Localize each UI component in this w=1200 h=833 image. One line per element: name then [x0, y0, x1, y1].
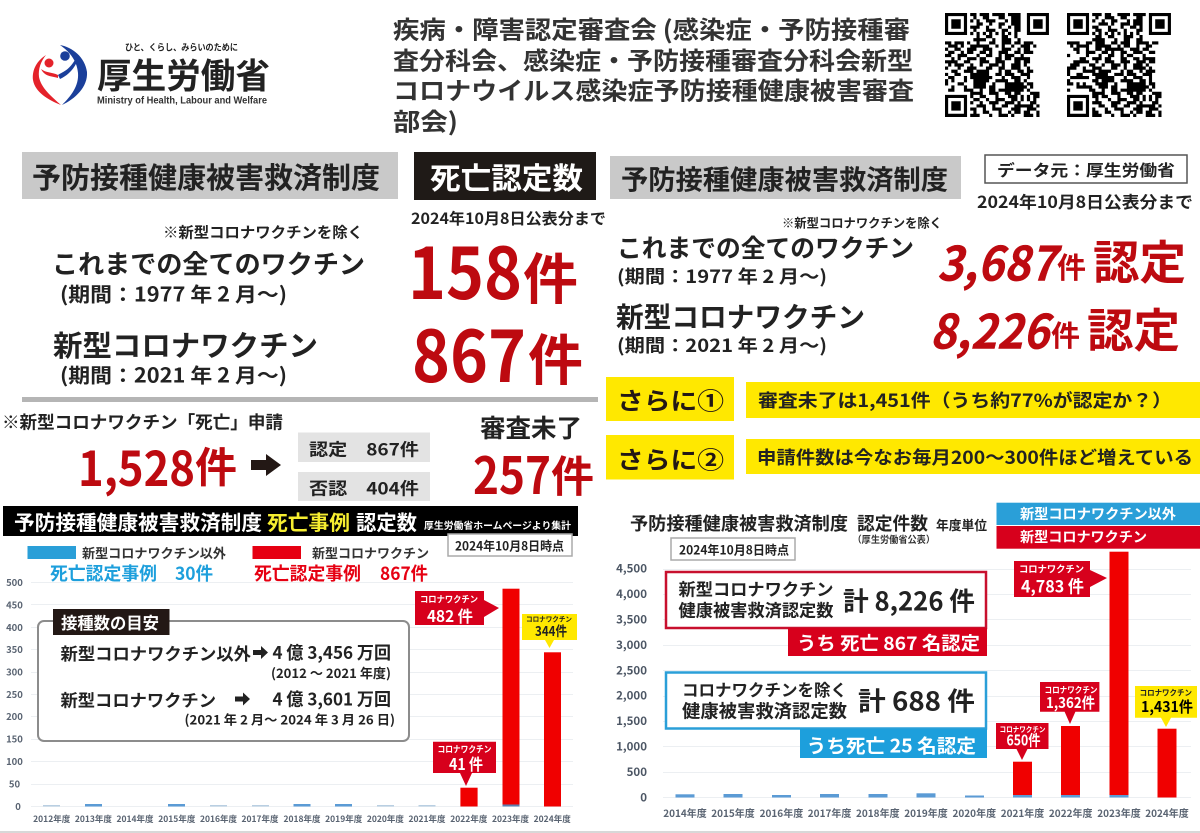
stat: 8,226 certified: 件: [1051, 313, 1080, 355]
x axis years: 2020年度: [367, 813, 404, 825]
label: covid vaccine: (期間：2021 年 2 月〜): [617, 332, 827, 358]
bar chart: deaths by year: [43, 589, 561, 806]
chart title: （厚生労働省公表）: [852, 532, 935, 546]
legend: 新型コロナワクチン以外: [82, 543, 226, 562]
label: covid vaccine: 新型コロナワクチン: [53, 323, 318, 365]
x axis years: 2017年度: [808, 805, 851, 820]
stat: 1,528: 件: [195, 434, 237, 496]
stat box: denied: 否認 404件: [309, 474, 419, 500]
callout: 650: 650件: [1006, 730, 1040, 750]
label: all vaccines: [617, 229, 914, 289]
panel: left death chart: [3, 506, 578, 825]
chart title bar: 厚生労働省ホームページより集計: [424, 518, 571, 532]
callout: 4,783: コロナワクチン: [1019, 562, 1084, 576]
gridlines and y axis: 100: [6, 754, 23, 768]
gridlines and y axis: 50: [9, 776, 20, 790]
label: covid vaccine: [53, 323, 318, 388]
x axis years: 2023年度: [492, 813, 530, 825]
callout: 1,362: [1040, 682, 1099, 724]
callout: further 1: さらに①: [617, 382, 724, 416]
info box: other vaccines total: 健康被害救済認定数: [682, 698, 847, 724]
stat box: certified: 認定 867件: [309, 436, 419, 460]
gridlines and y axis: 3,000: [616, 637, 647, 653]
legend bands: 新型コロナワクチン: [1020, 527, 1147, 547]
stat: 158: 件: [523, 235, 578, 315]
heading: committee title: 部会): [393, 104, 458, 138]
info box: vaccination count guide: 4 億 3,601 万回: [272, 686, 391, 712]
label: all vaccines: これまでの全てのワクチン: [52, 244, 365, 282]
callout: 41: 41 件: [449, 751, 483, 775]
info box: covid vaccine total: 新型コロナワクチン: [678, 576, 834, 600]
gridlines and y axis: 0: [15, 799, 21, 813]
label: all vaccines: [52, 244, 365, 308]
chart title bar: [3, 506, 578, 536]
callout: 344: 344件: [535, 620, 567, 640]
heading: committee title: 疾病・障害認定審査会 (感染症・予防接種審: [393, 12, 910, 46]
chart title bar: 予防接種健康被害救済制度: [14, 506, 262, 536]
x axis years: 2021年度: [1001, 805, 1044, 820]
date box: 2024年10月8日時点: [679, 540, 789, 558]
info box: other vaccines total: 計 688 件: [858, 682, 975, 718]
callout: 482: コロナワクチン: [420, 592, 478, 606]
x axis years: [663, 805, 1189, 820]
gridlines and y axis: 4,000: [616, 586, 647, 602]
label: covid death applications: ※新型コロナワクチン「死亡」申請: [2, 410, 283, 434]
x axis years: 2018年度: [856, 805, 900, 820]
x axis years: 2022年度: [450, 813, 488, 825]
logo tagline: ひと、くらし、みらいのために: [125, 40, 238, 54]
heading: death certification count: 死亡認定数: [430, 154, 583, 198]
callout: further 1: [606, 377, 1200, 421]
stat: 3,687 certified: 3,687: [937, 226, 1063, 294]
gridlines and y axis: 4,500: [616, 561, 647, 577]
x axis years: 2017年度: [241, 813, 279, 825]
legend: 30件: [175, 560, 213, 586]
callout: 41: コロナワクチン: [438, 742, 492, 756]
x axis years: 2019年度: [325, 813, 363, 825]
icon: heart figures: [33, 45, 87, 105]
gridlines and y axis: 2,000: [616, 688, 647, 704]
callout: 1,362: コロナワクチン: [1044, 684, 1098, 696]
callout: 4,783: [1014, 561, 1107, 598]
chart title bar: 死亡事例: [267, 506, 350, 536]
info box: vaccination count guide: 接種数の目安: [61, 610, 159, 634]
gridlines and y axis: 500: [6, 575, 23, 589]
source box: データ元：厚生労働省: [997, 157, 1175, 181]
x axis years: 2015年度: [158, 813, 196, 825]
callout: 650: [996, 723, 1048, 760]
gridlines and y axis: 250: [6, 687, 23, 701]
legend: 867件: [380, 560, 428, 586]
stat: 8,226 certified: 8,226: [930, 294, 1055, 362]
note: published date: 2024年10月8日公表分まで: [411, 207, 606, 229]
info box: vaccination count guide: (2021 年 2 月～ 2024 年 3 月 26 日): [184, 710, 395, 728]
heading: committee title: 査分科会、感染症・予防接種審査分科会新型: [393, 42, 913, 78]
chart title: [630, 510, 987, 546]
callout: 1,431: [1135, 686, 1197, 727]
x axis years: 2019年度: [904, 805, 948, 820]
gridlines and y axis: 150: [6, 732, 23, 746]
stat: 3,687 certified: 認定: [1093, 227, 1186, 293]
info box: other vaccines total: [666, 672, 987, 758]
chart title: 予防接種健康被害救済制度: [630, 510, 848, 536]
info box: vaccination count guide: [38, 609, 409, 741]
legend: 死亡認定事例: [50, 560, 157, 586]
label: covid vaccine: (期間：2021 年 2 月〜): [60, 360, 287, 388]
arrow: [251, 454, 281, 476]
stat: 867: 867: [412, 301, 526, 403]
callout: further 2: [606, 435, 1200, 480]
callout: further 2: 申請件数は今なお毎月200〜300件ほど増えている: [757, 444, 1193, 470]
stat: 8,226 certified: [930, 294, 1180, 362]
legend: 死亡認定事例: [254, 560, 361, 586]
gridlines and y axis: 500: [627, 764, 647, 780]
x axis years: 2014年度: [116, 813, 154, 825]
gridlines and y axis: 1,500: [616, 713, 647, 729]
bar chart: certifications by year: [676, 552, 1176, 798]
x axis years: 2014年度: [663, 805, 707, 820]
label: covid vaccine: [616, 296, 865, 358]
x axis years: 2021年度: [408, 813, 446, 825]
callout: 482: [415, 591, 499, 627]
info box: vaccination count guide: (2012 ～ 2021 年度): [271, 663, 391, 682]
logo wordmark: 厚生労働省: [97, 48, 270, 100]
label: all vaccines: (期間：1977 年 2 月〜): [60, 278, 287, 308]
label: all vaccines: (期間：1977 年 2 月〜): [617, 263, 827, 289]
stat: 3,687 certified: [937, 226, 1186, 294]
callout: further 1: 審査未了は1,451件（うち約77%が認定か？）: [758, 387, 1172, 413]
gridlines and y axis: 200: [6, 709, 23, 723]
icon: QR code 2: [1067, 13, 1171, 117]
callout: further 2: さらに②: [617, 440, 724, 476]
callout: 344: [522, 614, 577, 648]
gridlines and y axis: 3,500: [616, 612, 647, 628]
callout: 4,783: 4,783 件: [1021, 572, 1084, 598]
x axis years: 2023年度: [1097, 805, 1141, 820]
stat: 257: 257: [473, 435, 551, 509]
info box: covid vaccine total: うち 死亡 867 名認定: [797, 630, 980, 656]
x axis years: 2012年度: [33, 813, 71, 825]
callout: 482: 482 件: [427, 603, 473, 627]
gridlines and y axis: 2,500: [616, 662, 647, 678]
x axis years: 2018年度: [283, 813, 321, 825]
legend: [28, 543, 429, 586]
logo english name: Ministry of Health, Labour and Welfare: [97, 96, 267, 106]
info box: vaccination count guide: 4 億 3,456 万回: [272, 640, 391, 665]
chart title: 認定件数: [857, 510, 928, 536]
stat box: certified: [298, 432, 430, 462]
legend bands: 新型コロナワクチン以外: [1020, 504, 1177, 524]
date box: 2024年10月8日時点: [455, 536, 564, 554]
x axis years: 2024年度: [1145, 805, 1189, 820]
info box: covid vaccine total: 計 8,226 件: [843, 582, 975, 618]
label: covid vaccine: 新型コロナワクチン: [616, 296, 865, 336]
heading: committee title: コロナウイルス感染症予防接種健康被害審査: [393, 72, 914, 108]
stat: 867: 件: [528, 316, 583, 396]
x axis years: 2016年度: [200, 813, 238, 825]
stat: 3,687 certified: 件: [1057, 245, 1086, 287]
note: excluding covid vaccines: ※新型コロナワクチンを除く: [782, 212, 942, 232]
legend bands: [996, 503, 1200, 549]
note: published date: 2024年10月8日公表分まで: [977, 189, 1193, 213]
gridlines and y axis: 450: [6, 598, 23, 612]
logo: Ministry of Health, Labour and Welfare: [33, 40, 270, 106]
gridlines and y axis: [6, 575, 573, 813]
gridlines and y axis: 1,000: [616, 738, 647, 754]
chart title: 年度単位: [936, 515, 987, 534]
heading: relief system right: 予防接種健康被害救済制度: [621, 158, 948, 198]
callout: 344: コロナワクチン: [526, 614, 572, 624]
note: excluding covid vaccines: ※新型コロナワクチンを除く: [163, 222, 363, 242]
x axis years: 2016年度: [760, 805, 803, 820]
stat: 257: 件: [551, 443, 594, 505]
gridlines and y axis: [616, 561, 1191, 805]
chart title bar: 認定数: [356, 506, 417, 536]
panel: left death certification: [2, 152, 606, 509]
source box: [985, 155, 1187, 183]
info box: covid vaccine total: 健康被害救済認定数: [678, 596, 834, 622]
legend: 新型コロナワクチン: [312, 543, 429, 562]
panel: right certification: [606, 155, 1200, 480]
stat: 1,528: 1,528: [78, 430, 195, 500]
icon: QR code 1: [945, 13, 1049, 117]
x axis years: 2020年度: [952, 805, 996, 820]
label: review pending: 審査未了: [480, 409, 582, 445]
stat: 158: 158: [408, 218, 522, 320]
info box: vaccination count guide: 新型コロナワクチン: [60, 686, 216, 712]
x axis years: 2015年度: [711, 805, 755, 820]
x axis years: 2013年度: [75, 813, 112, 825]
info box: other vaccines total: うち死亡 25 名認定: [807, 732, 976, 758]
x axis years: 2022年度: [1049, 805, 1093, 820]
gridlines and y axis: 0: [640, 789, 647, 805]
x axis years: [33, 813, 571, 825]
callout: 1,362: 1,362件: [1046, 692, 1095, 713]
callout: 650: コロナワクチン: [1000, 724, 1046, 735]
gridlines and y axis: 350: [6, 642, 23, 656]
heading: committee title: [393, 12, 914, 138]
callout: 41: [433, 742, 496, 786]
info box: other vaccines total: コロナワクチンを除く: [682, 677, 847, 701]
gridlines and y axis: 300: [6, 664, 23, 678]
stat: 8,226 certified: 認定: [1087, 295, 1180, 361]
callout: 1,431: 1,431件: [1141, 696, 1193, 717]
callout: 1,431: コロナワクチン: [1140, 688, 1192, 698]
info box: vaccination count guide: 新型コロナワクチン以外: [60, 640, 252, 665]
panel: right certification chart: [616, 503, 1200, 820]
heading: relief system left: 予防接種健康被害救済制度: [32, 155, 380, 197]
gridlines and y axis: 400: [6, 620, 23, 634]
x axis years: 2024年度: [534, 813, 571, 825]
label: all vaccines: これまでの全てのワクチン: [617, 229, 914, 265]
stat box: denied: [298, 472, 430, 501]
info box: covid vaccine total: [666, 572, 987, 656]
